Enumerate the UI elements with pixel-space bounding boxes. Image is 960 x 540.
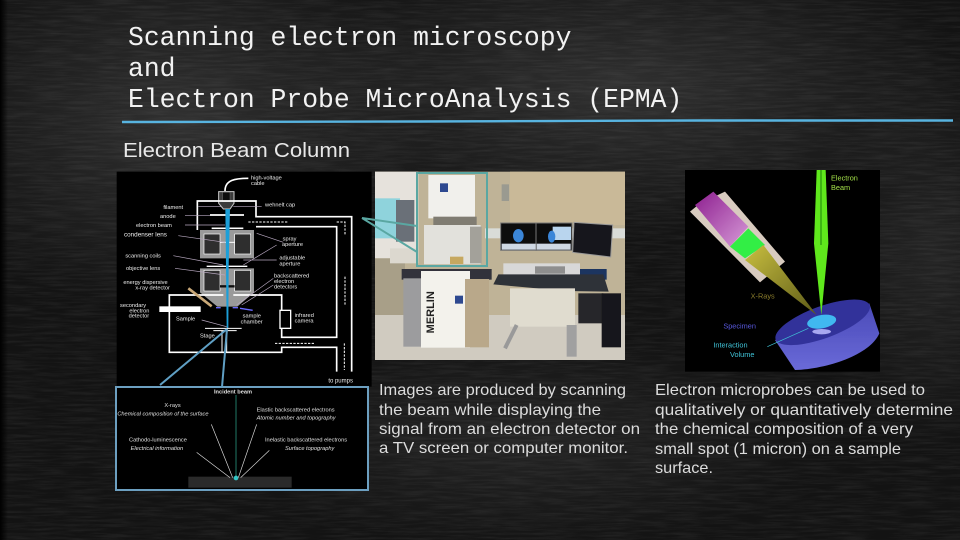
backscatter detectors [216,308,253,310]
infrared camera [280,310,291,328]
schematic labels: Stage [200,334,215,340]
callout lines from column to inset [160,329,227,387]
inset labels: Elastic backscattered electrons [257,408,335,414]
microprobe labels: Beam [831,183,850,192]
text block: imaging caption [379,382,640,457]
photo: MERLIN SEM instrument [375,172,625,360]
text block: imaging caption: signal from an electron detector on [379,421,640,438]
title: Electron Probe MicroAnalysis (EPMA) [128,85,682,115]
inset labels: X-rays [164,403,181,409]
schematic labels: condenser lens [124,231,167,238]
schematic labels: anode [160,214,176,220]
text block: imaging caption: the beam while displaying the [379,402,601,419]
schematic labels: infrared [295,313,314,319]
microprobe labels: Specimen [723,321,756,330]
schematic labels: cable [251,181,265,187]
instrument column [402,175,492,348]
schematic labels: camera [295,319,314,325]
signal rays [197,424,269,478]
schematic labels: high-voltage [251,176,282,182]
gun and cable [219,178,248,209]
inset labels: Incident beam [214,390,252,396]
schematic labels: secondary [120,303,146,309]
title underline [122,120,953,122]
schematic labels: chamber [241,320,263,326]
text block: microprobe caption: the chemical composition of a very [655,421,913,438]
text block: imaging caption: Images are produced by scanning [379,382,626,399]
text block: microprobe caption [655,382,953,477]
title: and [128,54,176,84]
schematic labels: sample [243,314,261,320]
sample stage [205,328,242,352]
schematic labels: energy dispersive [123,280,168,286]
schematic labels: scanning coils [125,254,161,260]
schematic labels: adjustable [279,256,305,262]
electron beam [225,209,230,328]
schematic labels [120,176,353,385]
microprobe labels [713,174,858,359]
schematic labels: detector [129,314,149,320]
vacuum arrows [248,222,345,370]
highlight box on photo with pointer lines [362,173,487,266]
schematic labels: aperture [279,262,300,268]
schematic labels: objective lens [126,266,160,272]
schematic labels: aperture [282,242,303,248]
schematic labels: Sample [176,316,195,322]
microprobe labels: X-Rays [751,291,775,300]
schematic labels: electron [129,308,149,314]
inset labels: Electrical information [131,446,183,452]
schematic labels: detectors [274,285,297,291]
title: Scanning electron microscopy [128,23,571,53]
x-ray detector body [690,192,817,315]
vacuum walls [169,201,352,372]
schematic labels: filament [163,205,184,211]
heading: Electron Beam Column: Electron Beam Column [123,140,350,162]
specimen disc [770,290,879,370]
inset labels: Surface topography [285,446,336,452]
secondary electron detector [159,306,201,312]
microprobe labels: Electron [831,174,858,183]
diagram: electron beam column schematic [117,172,372,387]
x-ray detector [188,288,212,306]
inset labels: Chemical composition of the surface [117,412,209,418]
specimen [188,477,292,488]
schematic labels: wehnelt cap [264,203,295,209]
text block: microprobe caption: surface. [655,460,713,477]
microprobe labels: Volume [730,350,754,359]
inset labels [117,390,347,452]
schematic labels: electron [274,279,294,285]
inset labels: Cathodo-luminescence [129,438,187,444]
schematic labels: spray [283,236,297,242]
text block: microprobe caption: Electron microprobes can be used to [655,382,925,399]
schematic labels: electron beam [136,223,172,229]
electron beam [814,170,828,315]
text block: microprobe caption: qualitatively or quantitatively determine [655,402,953,419]
text block: microprobe caption: small spot (1 micron) on a sample [655,441,901,458]
schematic labels: x-ray detector [135,285,170,291]
schematic labels: to pumps [328,379,353,385]
microprobe labels: Interaction [713,341,748,350]
desk and monitors [493,184,621,357]
inset labels: Atomic number and topography [256,416,337,422]
diagram: electron microprobe [685,170,880,372]
inset: electron interactions at the sample [116,387,368,490]
inset labels: Inelastic backscattered electrons [265,438,347,444]
instrument column: MERLIN [425,291,437,333]
operator's equipment [396,200,414,242]
incident beam [234,395,238,477]
schematic labels: backscattered [274,273,309,279]
title [128,23,682,115]
leader lines [173,207,283,327]
column lenses [200,215,254,307]
text block: imaging caption: a TV screen or computer monitor. [379,440,628,457]
